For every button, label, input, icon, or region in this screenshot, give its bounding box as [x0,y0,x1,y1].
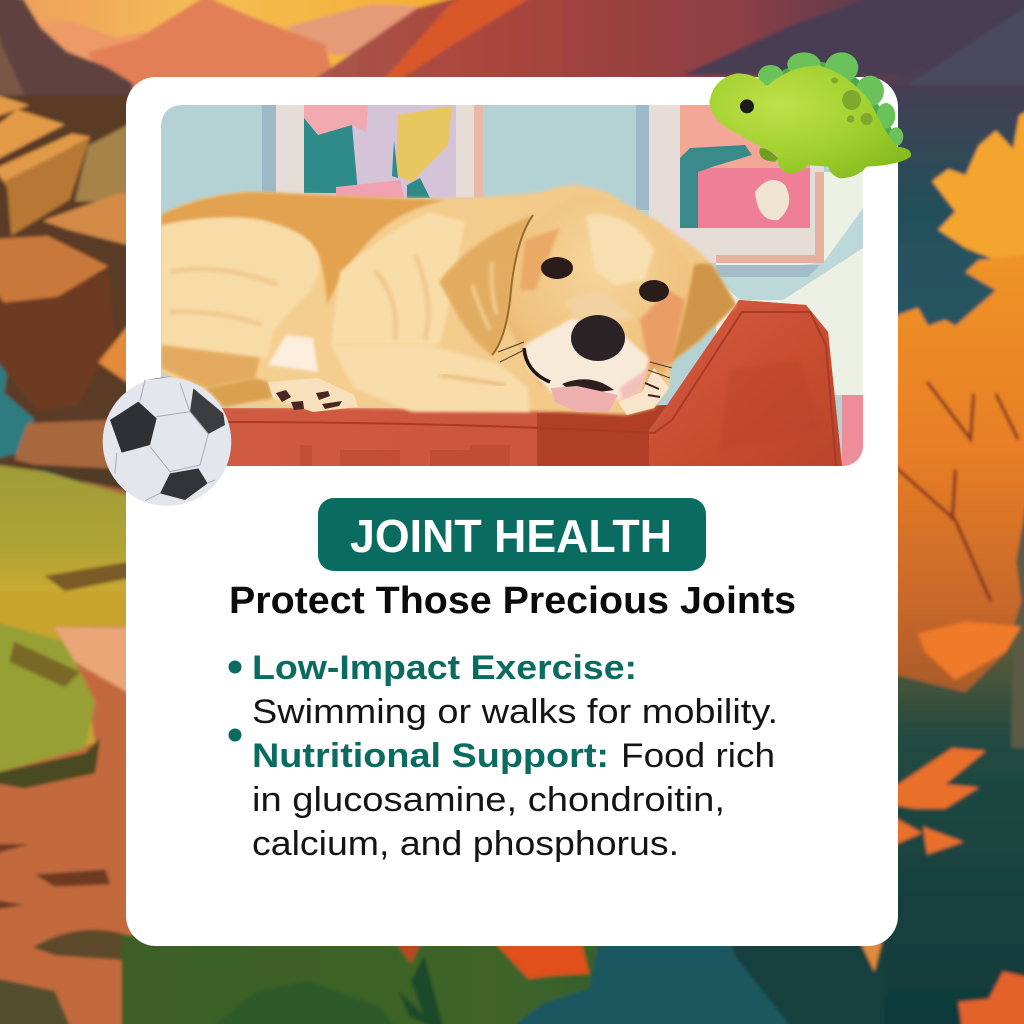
bullet: low-impact exercise: Low-Impact Exercise: [252,649,637,687]
bullet: low-impact exercise: Swimming or walks for mobility. [252,693,778,731]
subtitle: Protect Those Precious Joints [229,580,796,622]
forest floor at the bottom [122,935,905,1024]
panel: white card [126,77,898,946]
muzzle [524,318,649,400]
dog body [161,185,736,415]
eyes [541,257,573,279]
bullet: nutritional support: calcium, and phosphorus. [252,825,679,863]
grass and path on the left [0,465,136,1024]
dinosaur eye [740,99,754,113]
right ear [671,264,736,362]
bullet: nutritional support: Nutritional Support: [252,737,609,775]
artwork: right framed painting [636,105,824,277]
heading badge [318,498,706,571]
dinosaur body [709,66,911,178]
shoulder [331,212,465,345]
nose [571,315,625,361]
bullet: nutritional support [228,728,775,863]
bullet: nutritional support: Food rich [621,737,775,775]
rocks on the left [0,94,136,505]
mouth [524,348,618,412]
haunch [161,218,319,358]
bullet: low-impact exercise [228,649,778,731]
sky and mountains [0,0,1024,156]
dog bed [161,300,863,466]
wall shadow and cream wall [716,172,863,395]
left ear [439,215,533,355]
heading badge: JOINT HEALTH [350,510,672,562]
dog [161,185,736,415]
tail [161,345,260,388]
bullet: nutritional support: in glucosamine, chondroitin, [252,781,725,819]
back shadow fur [161,192,445,305]
whiskers [498,342,672,378]
rear paw [268,378,358,412]
belly [268,335,318,372]
autumn tree on the right [885,85,1024,1024]
icon: green dinosaur plush [709,52,911,178]
dinosaur spikes [758,52,903,148]
artwork: left framed painting [262,105,483,198]
dinosaur spots [831,77,873,125]
front paw [618,368,669,415]
icon: soccer ball [103,376,231,506]
foreleg [331,345,530,412]
head [507,234,688,394]
illustration: dog on red bed [161,105,863,466]
